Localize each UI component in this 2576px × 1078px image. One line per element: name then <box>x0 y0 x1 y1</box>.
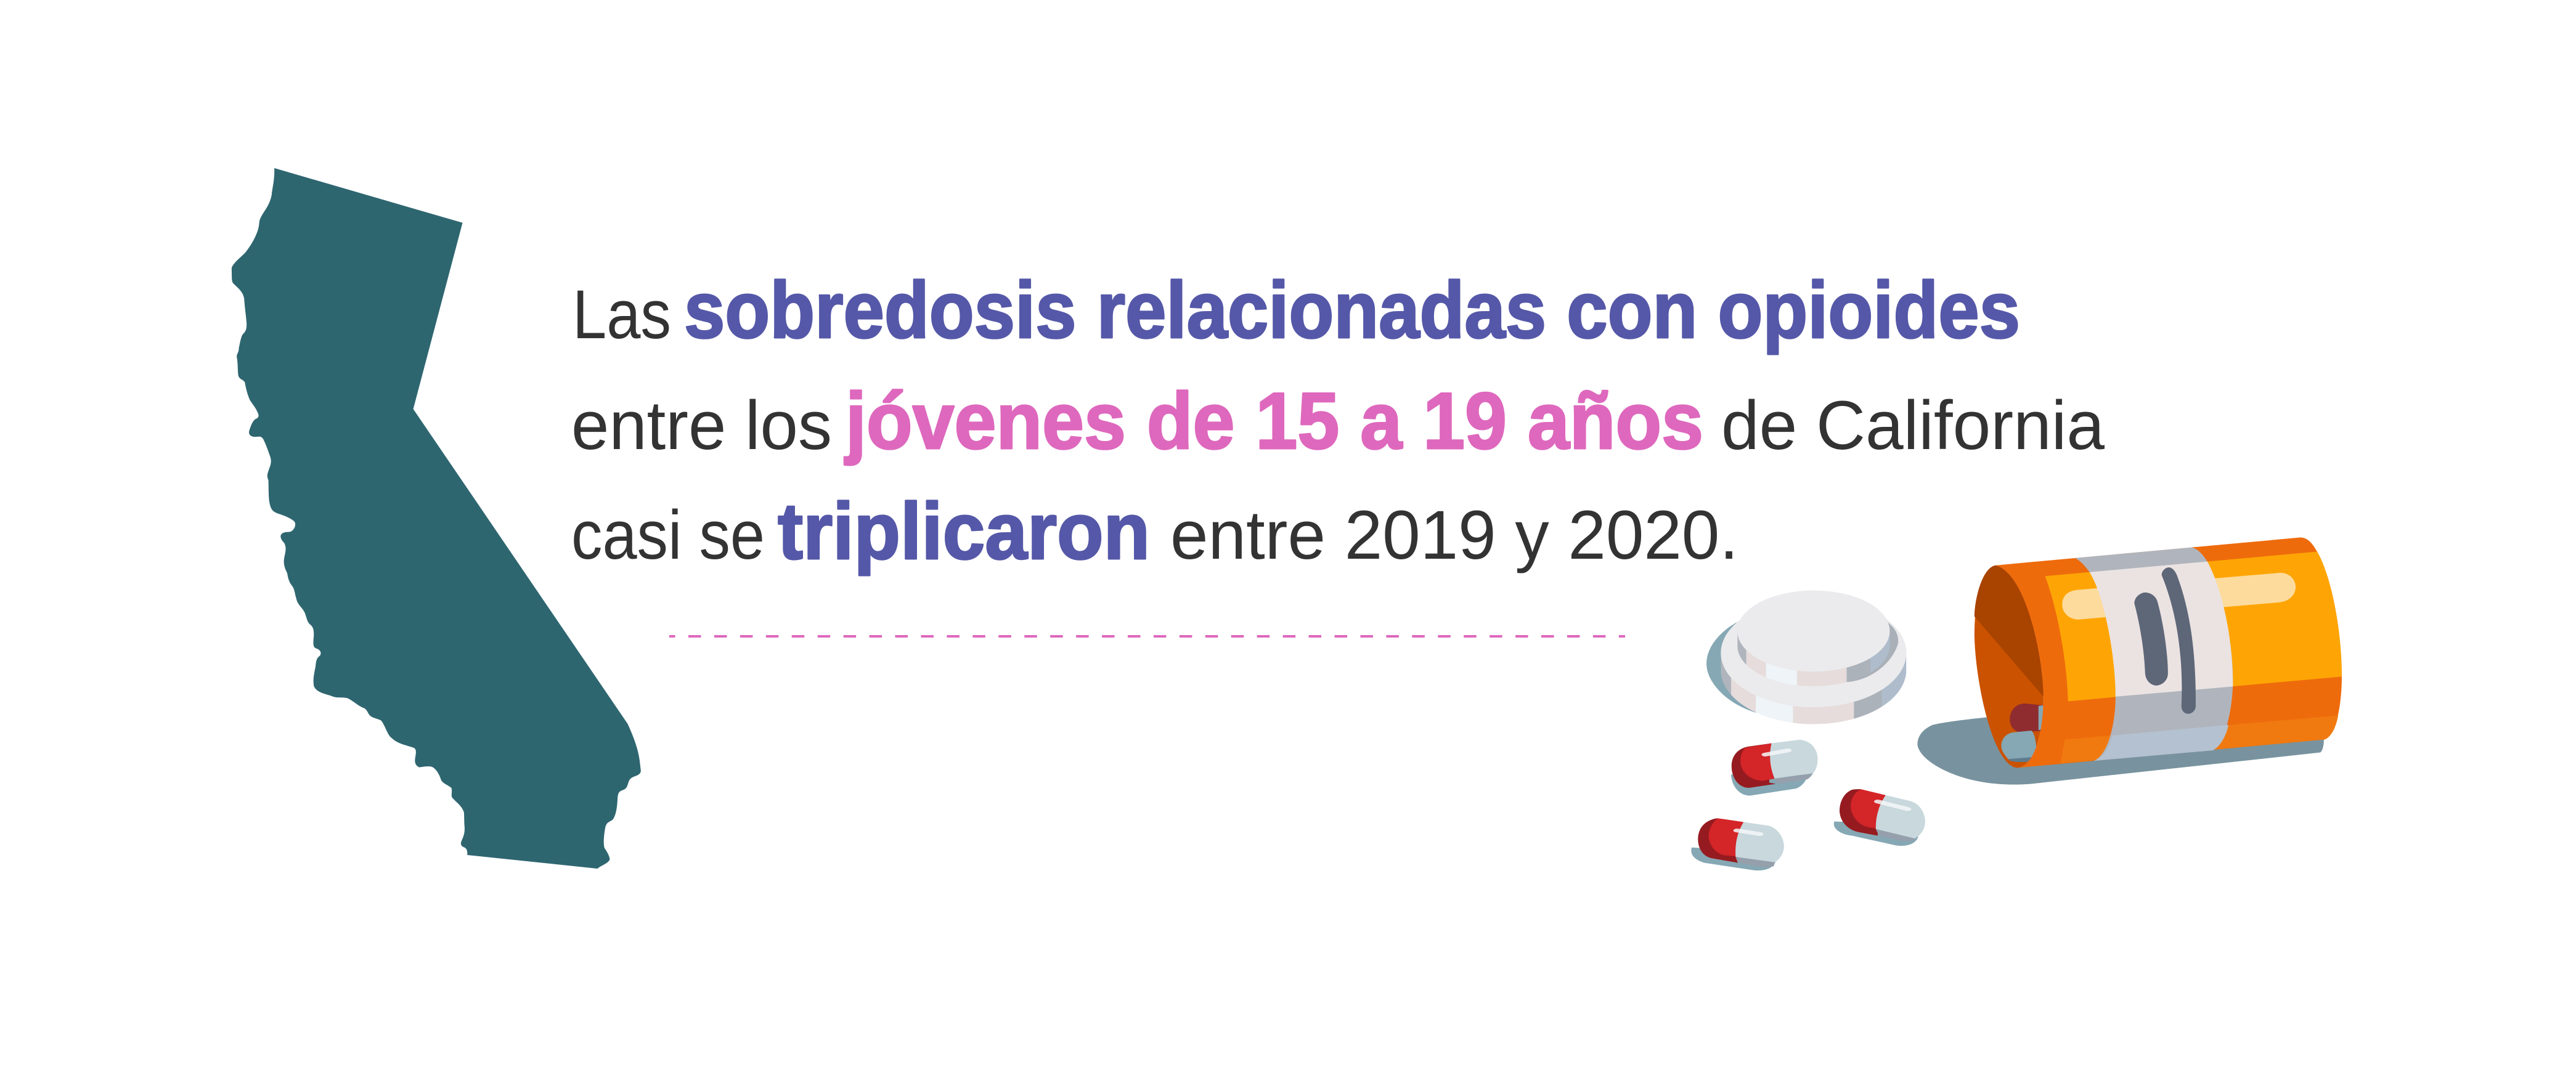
line 3: entre 2019 y 2020. <box>1170 496 1738 573</box>
line 3: casi se <box>571 496 765 573</box>
dashed divider <box>669 635 1625 638</box>
line 1: Las <box>573 276 671 353</box>
line 2: entre los <box>571 387 832 464</box>
line 2: de California <box>1721 387 2105 464</box>
headline text <box>571 265 2105 576</box>
line 3 <box>571 486 1738 576</box>
map: California silhouette <box>232 168 641 869</box>
line 1: sobredosis relacionadas con opioides <box>684 265 2020 355</box>
icon: capsule bottom <box>1691 818 1784 870</box>
line 2: jóvenes de 15 a 19 años <box>844 376 1703 466</box>
illustration: spilled pill bottle <box>1691 538 2342 870</box>
icon: bottle cap <box>1706 591 1907 725</box>
line 3: triplicaron <box>778 486 1150 576</box>
line 2 <box>571 376 2105 466</box>
icon: capsule top <box>1731 740 1817 796</box>
icon: orange bottle <box>1975 538 2342 768</box>
icon: capsule right <box>1834 789 1925 846</box>
icon: bottle shadow <box>1917 718 2324 785</box>
bottle label <box>2075 548 2233 761</box>
